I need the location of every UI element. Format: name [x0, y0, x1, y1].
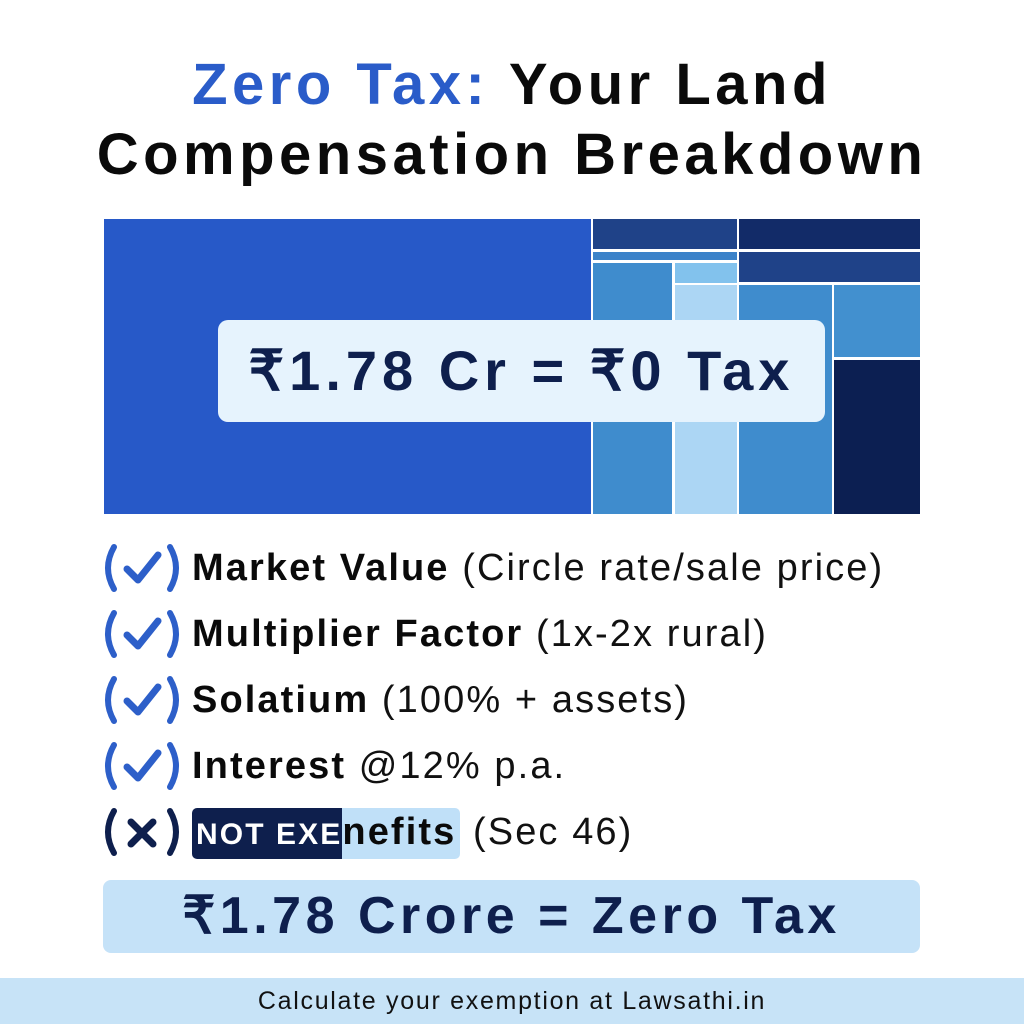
callout: headline figure — [218, 320, 825, 422]
item: interest: Interest @12% p.a. — [192, 745, 566, 787]
title: Zero Tax: Your Land — [192, 52, 832, 117]
item: not exempt: NOT EXEnefits — [196, 811, 456, 853]
item: solatium: Solatium (100% + assets) — [192, 679, 689, 721]
item: not exempt — [104, 808, 633, 859]
chart: treemap — [104, 219, 920, 514]
title: Compensation Breakdown — [97, 122, 927, 187]
list: compensation components — [104, 544, 884, 859]
footer: Calculate your exemption at Lawsathi.in — [258, 987, 766, 1015]
item: not exempt: (Sec 46) — [473, 811, 633, 853]
footer — [0, 978, 1024, 1024]
summary box — [103, 880, 920, 953]
title — [97, 52, 927, 187]
callout: headline figure: ₹1.78 Cr = ₹0 Tax — [249, 339, 794, 402]
summary box: ₹1.78 Crore = Zero Tax — [182, 887, 841, 945]
item: market value: Market Value (Circle rate/sale price) — [192, 547, 884, 589]
item: multiplier: Multiplier Factor (1x-2x rural) — [192, 613, 768, 655]
